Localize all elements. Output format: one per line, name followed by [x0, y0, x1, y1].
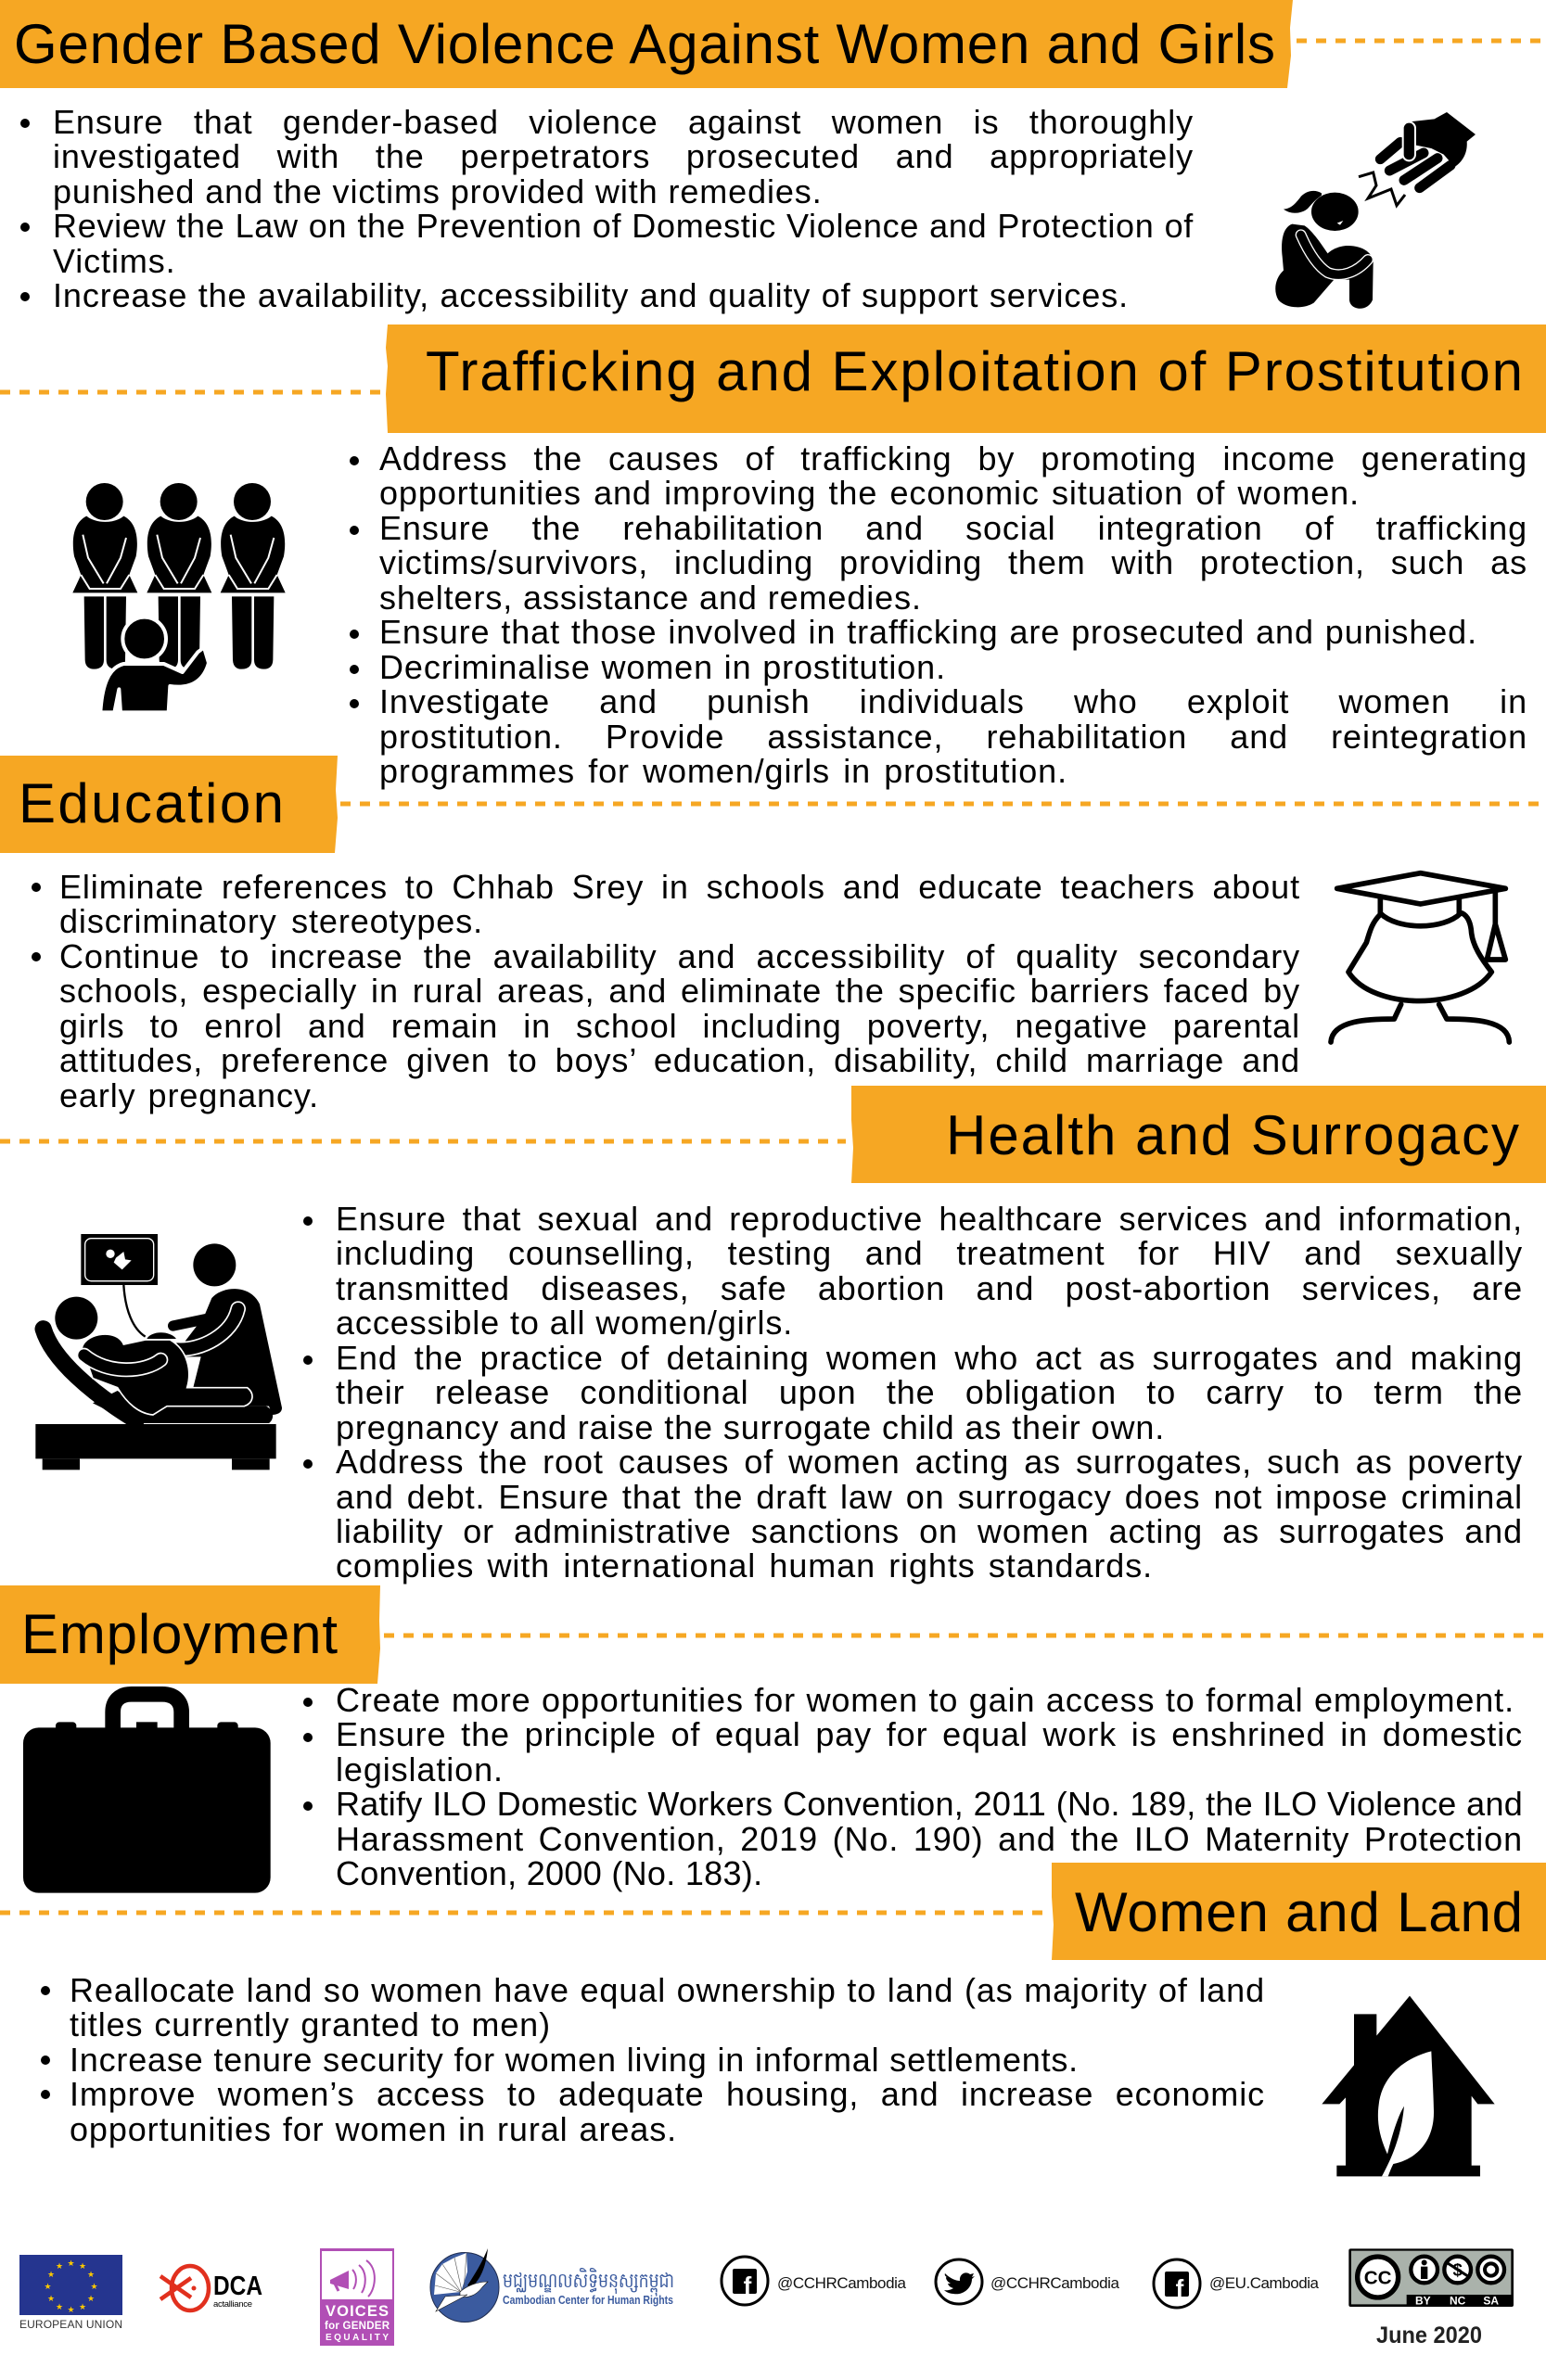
text block: health and surrogacy recommendations: pregnancy and raise the surrogate child as their own. [336, 1408, 1165, 1446]
text block: trafficking recommendations [350, 439, 1527, 790]
text block: women and land recommendations: titles currently granted to men) [70, 2005, 551, 2043]
text block: health and surrogacy recommendations: transmitted diseases, safe abortion and post-abortion services, are [336, 1269, 1523, 1307]
text block: trafficking recommendations: Address the causes of trafficking by promoting income generating [379, 439, 1527, 477]
text block: health and surrogacy recommendations: including counselling, testing and treatment for HIV and sexually [336, 1234, 1523, 1272]
heading: Gender Based Violence [0, 0, 1293, 88]
icon: ultrasound scene [35, 1234, 282, 1470]
heading: Employment [0, 1585, 380, 1684]
text block: employment recommendations: Convention, 2000 (No. 183). [336, 1854, 762, 1892]
text block: employment recommendations: legislation. [336, 1750, 504, 1788]
text block: trafficking recommendations: shelters, assistance and remedies. [379, 579, 922, 617]
text block: health and surrogacy recommendations: Address the root causes of women acting as surrogates, such as poverty [336, 1443, 1523, 1481]
badge: Creative Commons BY NC SA: CC [1364, 2267, 1392, 2288]
logo: European Union: ★ [87, 2270, 95, 2279]
logo: Voices for Gender Equality: EQUALITY [326, 2333, 389, 2343]
text block: health and surrogacy recommendations [303, 1200, 1523, 1585]
text block: women and land recommendations [41, 1971, 1265, 2148]
text block: trafficking recommendations: Decriminalise women in prostitution. [379, 648, 946, 686]
logo: European Union: ★ [47, 2270, 55, 2279]
text block: gender based violence recommendations: investigated with the perpetrators prosecuted and appropriately [53, 137, 1194, 175]
social: Facebook EU.Cambodia: f [1176, 2274, 1184, 2302]
text block: health and surrogacy recommendations: complies with international human rights standards. [336, 1546, 1153, 1585]
badge: Creative Commons BY NC SA: NC [1450, 2294, 1466, 2307]
social: Facebook EU.Cambodia [1152, 2259, 1320, 2309]
logo: Voices for Gender Equality: VOICES [326, 2303, 389, 2320]
logo: European Union: ★ [44, 2282, 52, 2291]
logo: European Union [19, 2255, 122, 2331]
text block: women and land recommendations: Increase tenure security for women living in informal settlements. [70, 2041, 1079, 2079]
social: Facebook CCHRCambodia: f [744, 2272, 752, 2299]
heading: Education [0, 756, 338, 853]
text block: women and land recommendations: opportunities for women in rural areas. [70, 2110, 677, 2148]
logo: European Union: ★ [67, 2259, 75, 2268]
text block: employment recommendations: Create more opportunities for women to gain access to formal employment. [336, 1681, 1514, 1719]
text block: trafficking recommendations: programmes for women/girls in prostitution. [379, 752, 1067, 790]
text block: trafficking recommendations: Ensure that those involved in trafficking are prosecuted and punished. [379, 613, 1477, 651]
heading: Trafficking and Exploitation of Prostitution [386, 325, 1546, 433]
text block: employment recommendations: Harassment Convention, 2019 (No. 190) and the ILO Maternity Protection [336, 1820, 1523, 1858]
logo: Cambodian Center for Human Rights [430, 2248, 674, 2323]
text block: trafficking recommendations: Ensure the rehabilitation and social integration of trafficking [379, 509, 1527, 547]
text block: trafficking recommendations: opportunities and improving the economic situation of women. [379, 474, 1360, 512]
social: Twitter CCHRCambodia [935, 2259, 1120, 2305]
logo: European Union: ★ [87, 2294, 95, 2303]
badge: Creative Commons BY NC SA: $ [1452, 2260, 1463, 2280]
heading: Health and Surrogacy [851, 1086, 1546, 1183]
text block: education recommendations [32, 868, 1300, 1114]
logo: European Union: ★ [79, 2302, 86, 2311]
text block: education recommendations: girls to enrol and remain in school including poverty, negative parental [59, 1007, 1300, 1045]
text block: gender based violence recommendations: Victims. [53, 242, 176, 280]
text block: women and land recommendations: Improve women’s access to adequate housing, and increase economic [70, 2075, 1265, 2113]
social: Facebook CCHRCambodia [720, 2255, 907, 2307]
date: June 2020: June 2020 [1376, 2323, 1482, 2348]
text block: women and land recommendations: Reallocate land so women have equal ownership to land (as majority of land [70, 1971, 1265, 2009]
logo: European Union: ★ [47, 2294, 55, 2303]
logo: DCA actalliance: actalliance [213, 2299, 252, 2310]
heading: Gender Based Violence: Gender Based Violence Against Women and Girls [14, 13, 1275, 75]
heading: Health and Surrogacy: Health and Surrogacy [946, 1104, 1519, 1166]
text block: trafficking recommendations: victims/survivors, including providing them with protection, such as [379, 543, 1527, 581]
text block: health and surrogacy recommendations: and debt. Ensure that the draft law on surrogacy does not impose criminal [336, 1478, 1523, 1515]
text block: education recommendations: attitudes, preference given to boys’ education, disability, child marriage and [59, 1041, 1300, 1079]
text block: health and surrogacy recommendations: accessible to all women/girls. [336, 1304, 793, 1342]
badge: Creative Commons BY NC SA: SA [1483, 2294, 1499, 2307]
heading: Trafficking and Exploitation of Prostitution: Trafficking and Exploitation of Prostitution [426, 340, 1523, 402]
logo: European Union: ★ [79, 2261, 86, 2271]
text block: health and surrogacy recommendations: their release conditional upon the obligation to carry to term the [336, 1373, 1523, 1411]
text block: gender based violence recommendations: Ensure that gender-based violence against women is thoroughly [53, 103, 1194, 141]
text block: gender based violence recommendations: punished and the victims provided with remedies. [53, 172, 823, 210]
badge: Creative Commons BY NC SA: BY [1415, 2294, 1431, 2307]
text block: trafficking recommendations: prostitution. Provide assistance, rehabilitation and reintegration [379, 718, 1527, 755]
text block: employment recommendations [303, 1681, 1523, 1892]
social: Twitter CCHRCambodia: @CCHRCambodia [990, 2274, 1120, 2292]
logo: European Union: ★ [67, 2305, 75, 2314]
badge: Creative Commons BY NC SA [1348, 2248, 1514, 2307]
text block: education recommendations: Eliminate references to Chhab Srey in schools and educate teachers about [59, 868, 1300, 906]
text block: health and surrogacy recommendations: liability or administrative sanctions on women acting as surrogates and [336, 1512, 1523, 1550]
logo: European Union: ★ [56, 2261, 63, 2271]
logo: European Union: ★ [90, 2282, 98, 2291]
social: Facebook EU.Cambodia: @EU.Cambodia [1209, 2274, 1320, 2292]
text block: education recommendations: discriminatory stereotypes. [59, 902, 483, 940]
heading: Employment: Employment [21, 1603, 338, 1665]
icon: graduate with mortarboard [1328, 870, 1512, 1045]
text block: gender based violence recommendations: Review the Law on the Prevention of Domestic Violence and Protection of [53, 207, 1194, 245]
heading: Education: Education [19, 772, 284, 834]
icon: three women and a man pointing [72, 483, 286, 710]
text block: employment recommendations: Ensure the principle of equal pay for equal work is enshrined in domestic [336, 1715, 1523, 1753]
heading: Women and Land: Women and Land [1075, 1881, 1523, 1943]
text block: education recommendations: Continue to increase the availability and accessibility of quality secondary [59, 937, 1300, 975]
text block: education recommendations: early pregnancy. [59, 1076, 319, 1114]
icon: hand striking a girl [1275, 112, 1476, 309]
text block: gender based violence recommendations [20, 103, 1194, 314]
logo: European Union: ★ [56, 2302, 63, 2311]
heading: Women and Land [1052, 1863, 1546, 1960]
logo: European Union: EUROPEAN UNION [19, 2318, 122, 2331]
logo: Voices for Gender Equality [320, 2248, 394, 2346]
logo: DCA actalliance [160, 2264, 262, 2312]
text block: gender based violence recommendations: Increase the availability, accessibility and quality of support services. [53, 276, 1129, 314]
logo: Voices for Gender Equality: for GENDER [325, 2321, 390, 2332]
social: Facebook CCHRCambodia: @CCHRCambodia [777, 2274, 907, 2292]
text block: health and surrogacy recommendations: End the practice of detaining women who act as surrogates and making [336, 1339, 1523, 1377]
icon: house with leaf [1322, 1995, 1495, 2177]
icon: briefcase [23, 1686, 271, 1893]
text block: trafficking recommendations: Investigate and punish individuals who exploit women in [379, 682, 1527, 720]
text block: employment recommendations: Ratify ILO Domestic Workers Convention, 2011 (No. 189, the ILO Violence and [336, 1785, 1523, 1823]
text block: education recommendations: schools, especially in rural areas, and eliminate the specific barriers faced by [59, 972, 1300, 1010]
text block: health and surrogacy recommendations: Ensure that sexual and reproductive healthcare services and information, [336, 1200, 1523, 1238]
